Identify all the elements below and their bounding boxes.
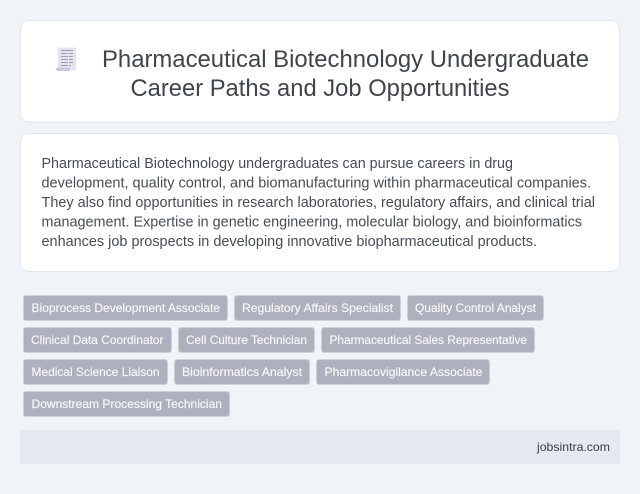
heading: Career Paths and Job Opportunities xyxy=(130,75,510,102)
tag xyxy=(322,328,534,352)
tag: Pharmacovigilance Associate xyxy=(324,365,483,379)
text block: description: development, quality control, and biomanufacturing within pharmaceutical companies. xyxy=(42,176,591,192)
tags: career paths xyxy=(24,296,544,416)
tag xyxy=(24,360,168,384)
tag xyxy=(24,328,172,352)
heading: Pharmaceutical Biotechnology Undergraduate xyxy=(102,46,589,73)
icon: document scroll xyxy=(56,48,76,71)
tag: Bioprocess Development Associate xyxy=(32,301,220,315)
tag xyxy=(234,296,400,320)
tag: Medical Science Liaison xyxy=(32,365,160,379)
panel: description xyxy=(20,134,620,272)
heading xyxy=(102,46,589,102)
footer xyxy=(20,430,620,464)
panel: title xyxy=(20,20,620,122)
text block: description: They also find opportunities in research laboratories, regulatory affairs, and clinical trial xyxy=(42,195,595,211)
tag xyxy=(408,296,544,320)
tag: Cell Culture Technician xyxy=(186,333,307,347)
text block: description xyxy=(42,156,595,250)
tag xyxy=(24,296,228,320)
tag xyxy=(316,360,490,384)
tag xyxy=(174,360,310,384)
tag: Quality Control Analyst xyxy=(415,301,537,315)
tag xyxy=(178,328,314,352)
tag: Bioinformatics Analyst xyxy=(182,365,303,379)
tag xyxy=(24,392,230,416)
tag: Regulatory Affairs Specialist xyxy=(242,301,394,315)
text block: description: management. Expertise in genetic engineering, molecular biology, and bioinformatics xyxy=(42,214,582,230)
text block: description: enhances job prospects in developing innovative biopharmaceutical products. xyxy=(42,234,537,250)
text block: description: Pharmaceutical Biotechnology undergraduates can pursue careers in drug xyxy=(42,156,513,172)
footer: jobsintra.com xyxy=(536,440,610,454)
tag: Pharmaceutical Sales Representative xyxy=(330,333,527,347)
tag: Clinical Data Coordinator xyxy=(31,333,164,347)
tag: Downstream Processing Technician xyxy=(32,397,222,411)
